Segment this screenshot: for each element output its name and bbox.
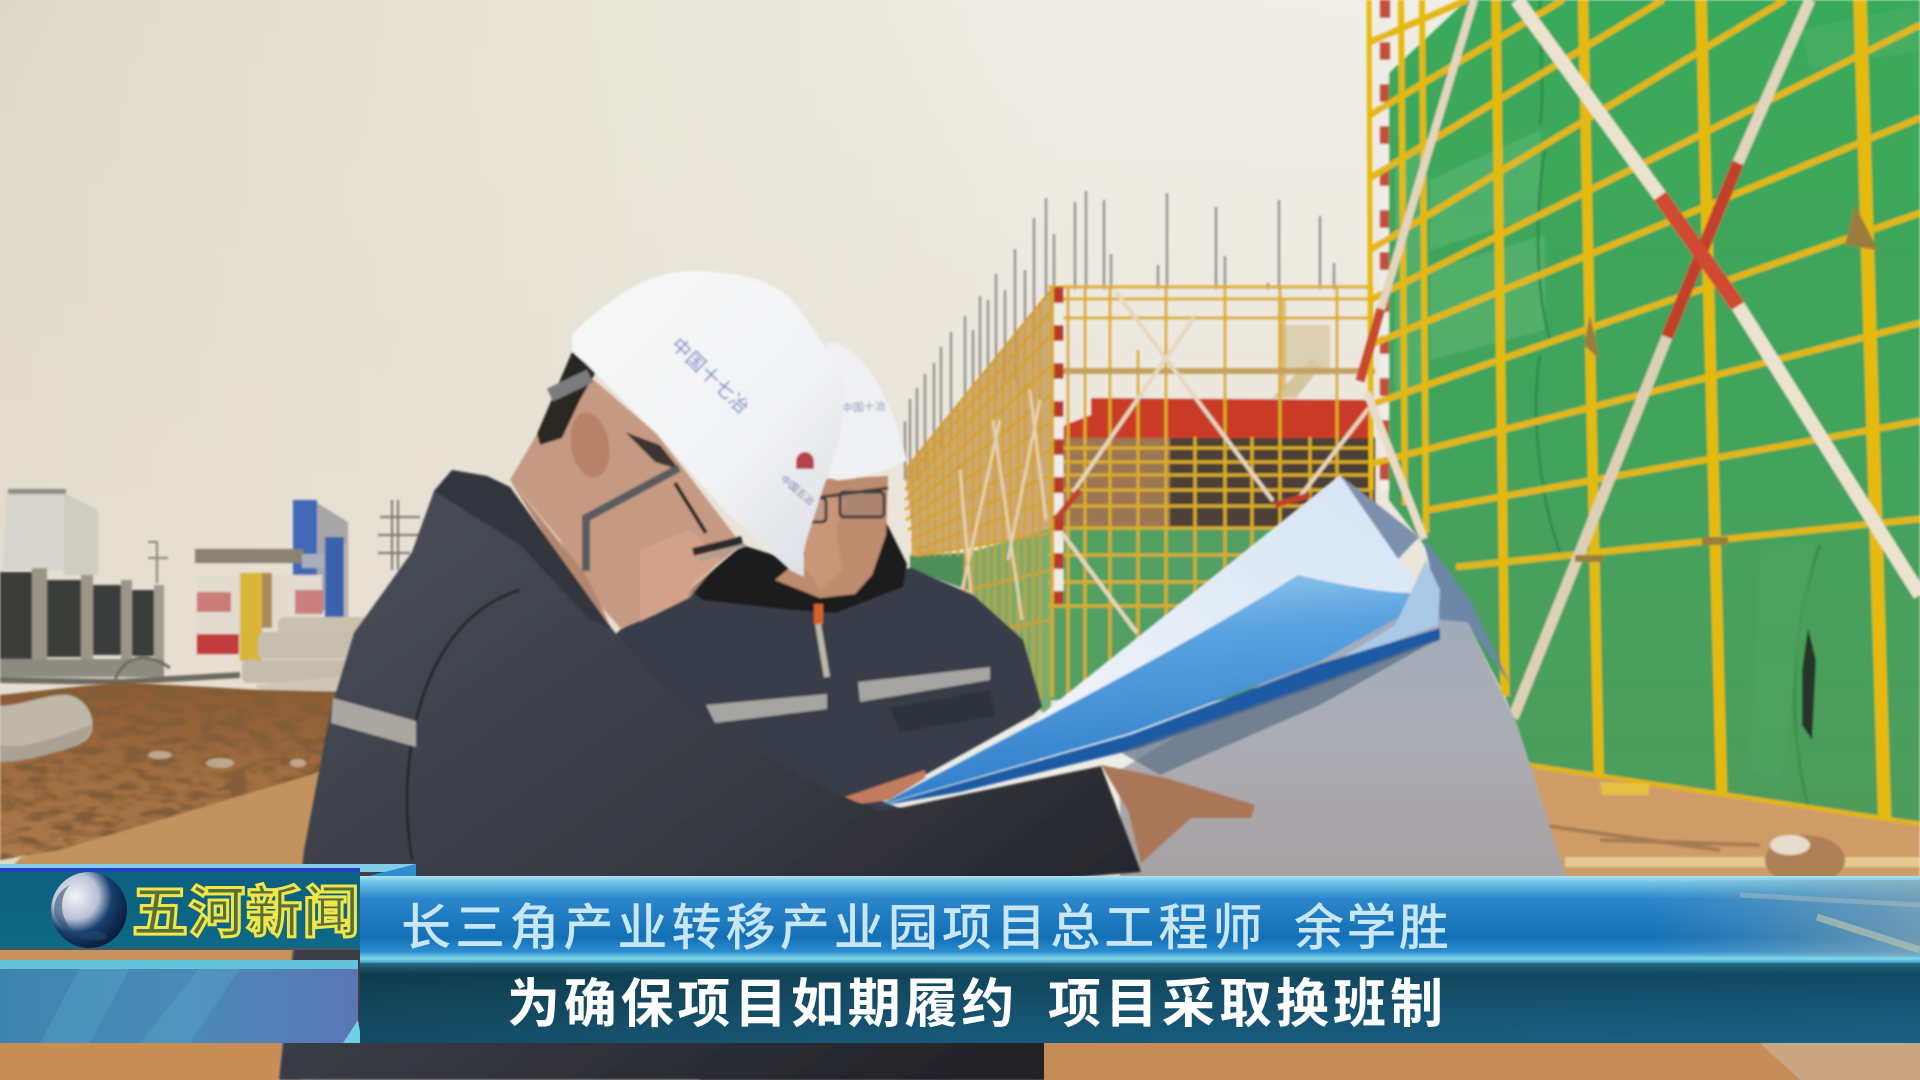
front worker	[279, 271, 1255, 1080]
lamp post	[148, 542, 168, 583]
orange cord toggle	[814, 604, 827, 677]
blueprint roll	[880, 475, 1567, 880]
main upper bar	[360, 876, 1920, 964]
neck and face	[510, 361, 742, 629]
harness strap	[586, 468, 679, 571]
speaker caption: 长三角产业转移产业园项目总工程师	[401, 900, 1267, 956]
green netted building	[1360, 0, 1920, 830]
far left: distant buildings, wall and gate	[0, 489, 420, 695]
ear	[566, 409, 614, 481]
concrete pipes	[242, 617, 368, 695]
side scaffold grid	[905, 290, 1051, 700]
logo text: 五河新闻	[132, 881, 360, 944]
globe icon	[51, 872, 127, 948]
helmet logo	[778, 452, 817, 508]
rear helmet: 中国十冶	[841, 399, 886, 415]
lower left panel	[0, 960, 362, 1043]
rear worker hand	[845, 770, 925, 805]
logo bar	[0, 864, 416, 950]
front scaffold grid	[1048, 287, 1372, 700]
vertical scaffold poles	[1369, 0, 1885, 830]
rear worker glasses	[800, 488, 888, 522]
main upper bar: 余学胜	[1294, 900, 1451, 956]
lighter window reflections	[1395, 5, 1920, 400]
net seams and tear	[1536, 0, 1820, 815]
lower third: news caption	[0, 864, 1920, 1043]
pocket flap	[890, 690, 995, 732]
sleeve seam	[407, 590, 520, 860]
main lower bar: 项目采取换班制	[1048, 975, 1447, 1034]
front face backing	[1051, 287, 1381, 437]
collar	[434, 470, 612, 629]
dark formwork	[1055, 437, 1375, 529]
red and white pole	[1052, 287, 1064, 604]
horizontal scaffold rungs	[1370, 0, 1920, 825]
blue sheet	[880, 575, 1426, 805]
crane	[1272, 300, 1330, 398]
side green wall	[910, 553, 968, 590]
hair	[537, 352, 596, 445]
jacket body	[279, 470, 1141, 1080]
rising poles	[905, 191, 1334, 480]
arm reflective stripe	[331, 698, 416, 747]
canopy and fence	[195, 549, 324, 661]
diagonal braces	[1360, 0, 1920, 718]
middle building under construction	[905, 191, 1381, 720]
white sheet	[1037, 475, 1426, 760]
diagonal braces	[1062, 292, 1369, 633]
bottom ground strip	[0, 948, 1920, 1080]
rear helmet	[827, 342, 907, 480]
ground right: planks and rubble	[1520, 766, 1920, 885]
large pipe on soil	[0, 695, 93, 762]
curled paper edges	[1330, 560, 1440, 665]
ground: soil and road on the left	[0, 682, 345, 1080]
rear worker	[600, 342, 1045, 1080]
side scaffold backing	[905, 290, 1051, 556]
green net	[1389, 0, 1920, 825]
red band	[1055, 398, 1372, 438]
green lower	[1051, 528, 1381, 700]
helmet	[572, 271, 845, 577]
blue gate	[293, 500, 348, 619]
back slate flap	[1340, 475, 1419, 559]
rear jacket stripes	[706, 667, 990, 723]
helmet text: 中国十七冶	[667, 334, 754, 419]
rear worker face	[775, 476, 888, 598]
big slate sheet	[1120, 590, 1567, 880]
boundary wall	[0, 568, 240, 690]
clamps	[1575, 205, 1878, 562]
helmet suspension	[550, 376, 590, 395]
dark rim of sheet	[1424, 538, 1510, 684]
glasses	[675, 483, 745, 560]
helmet logo: 中国五冶	[778, 472, 817, 508]
shadow under blue sheet	[880, 628, 1440, 806]
main lower bar	[360, 963, 1920, 1043]
power pylon	[378, 500, 420, 570]
outer scaffold poles	[1380, 0, 1390, 490]
distant white building	[3, 489, 98, 575]
subtitle: 为确保项目如期履约	[507, 975, 1018, 1034]
rear worker hood	[690, 510, 907, 613]
near hand	[1101, 765, 1255, 863]
rear worker jacket	[600, 568, 1045, 1080]
